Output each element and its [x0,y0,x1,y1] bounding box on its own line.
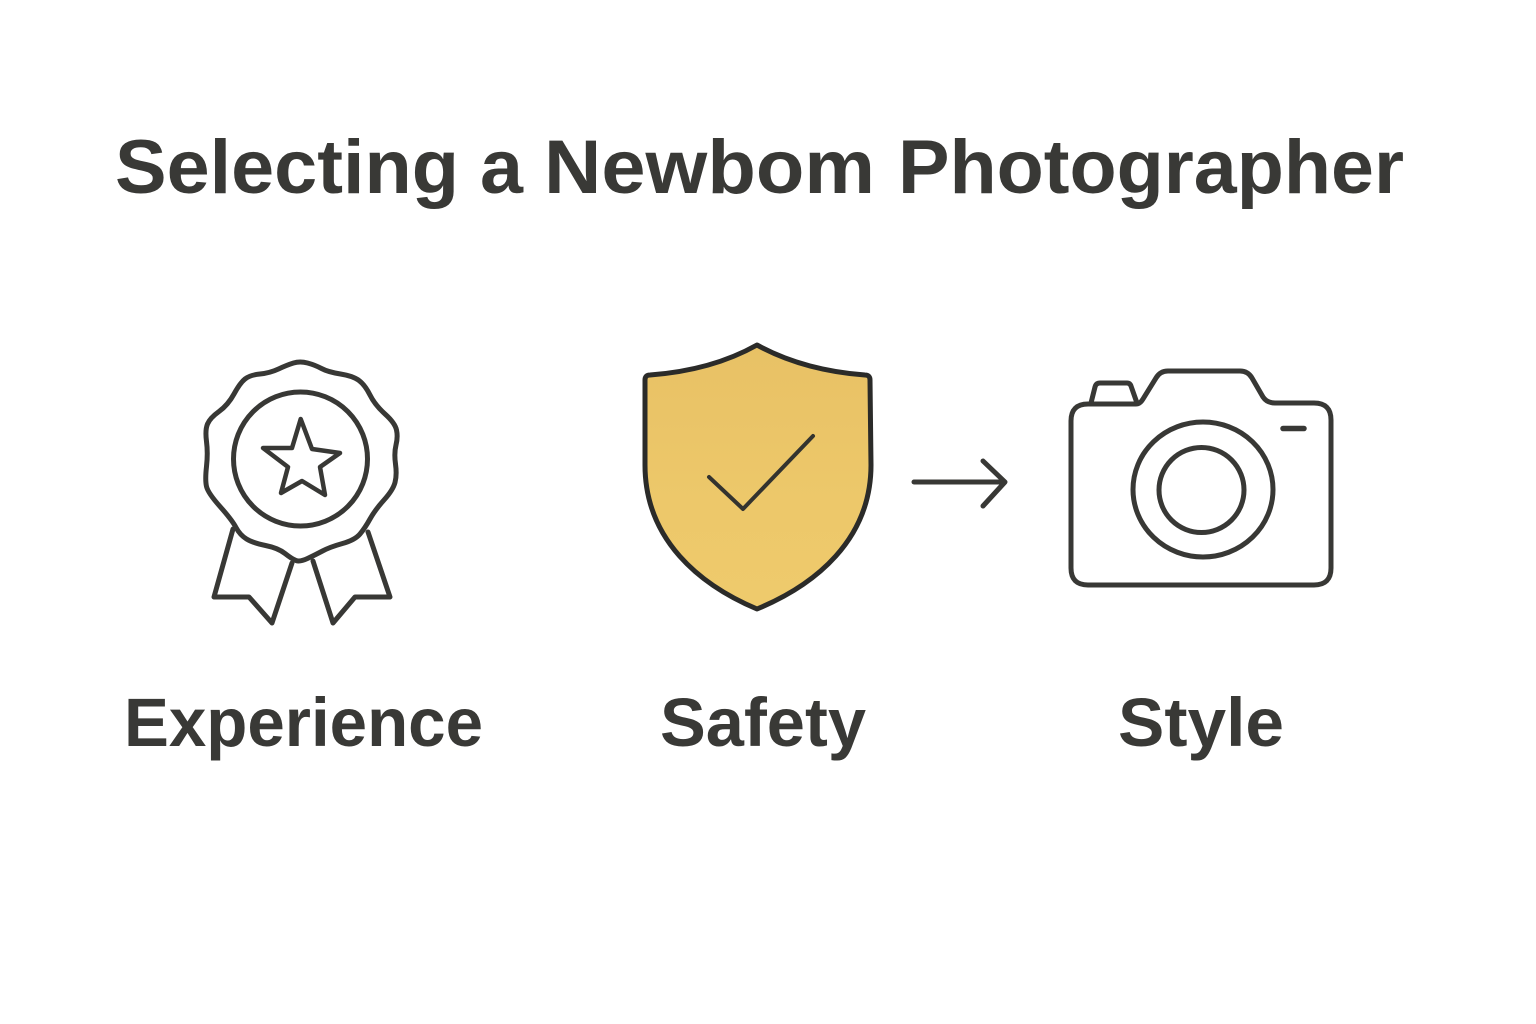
title [115,125,1404,210]
title: Photographer [898,125,1404,210]
title: a [480,125,524,210]
icon: camera [1071,371,1331,585]
title: Selecting [115,125,459,210]
arrow [914,461,1005,506]
icon: rosette badge with star [206,362,397,623]
label: Experience: Experience [124,684,483,761]
label: Safety: Safety [660,684,866,761]
title: Newbom [544,125,875,210]
label: Style: Style [1118,684,1284,761]
icon: safety shield with check [645,345,871,609]
